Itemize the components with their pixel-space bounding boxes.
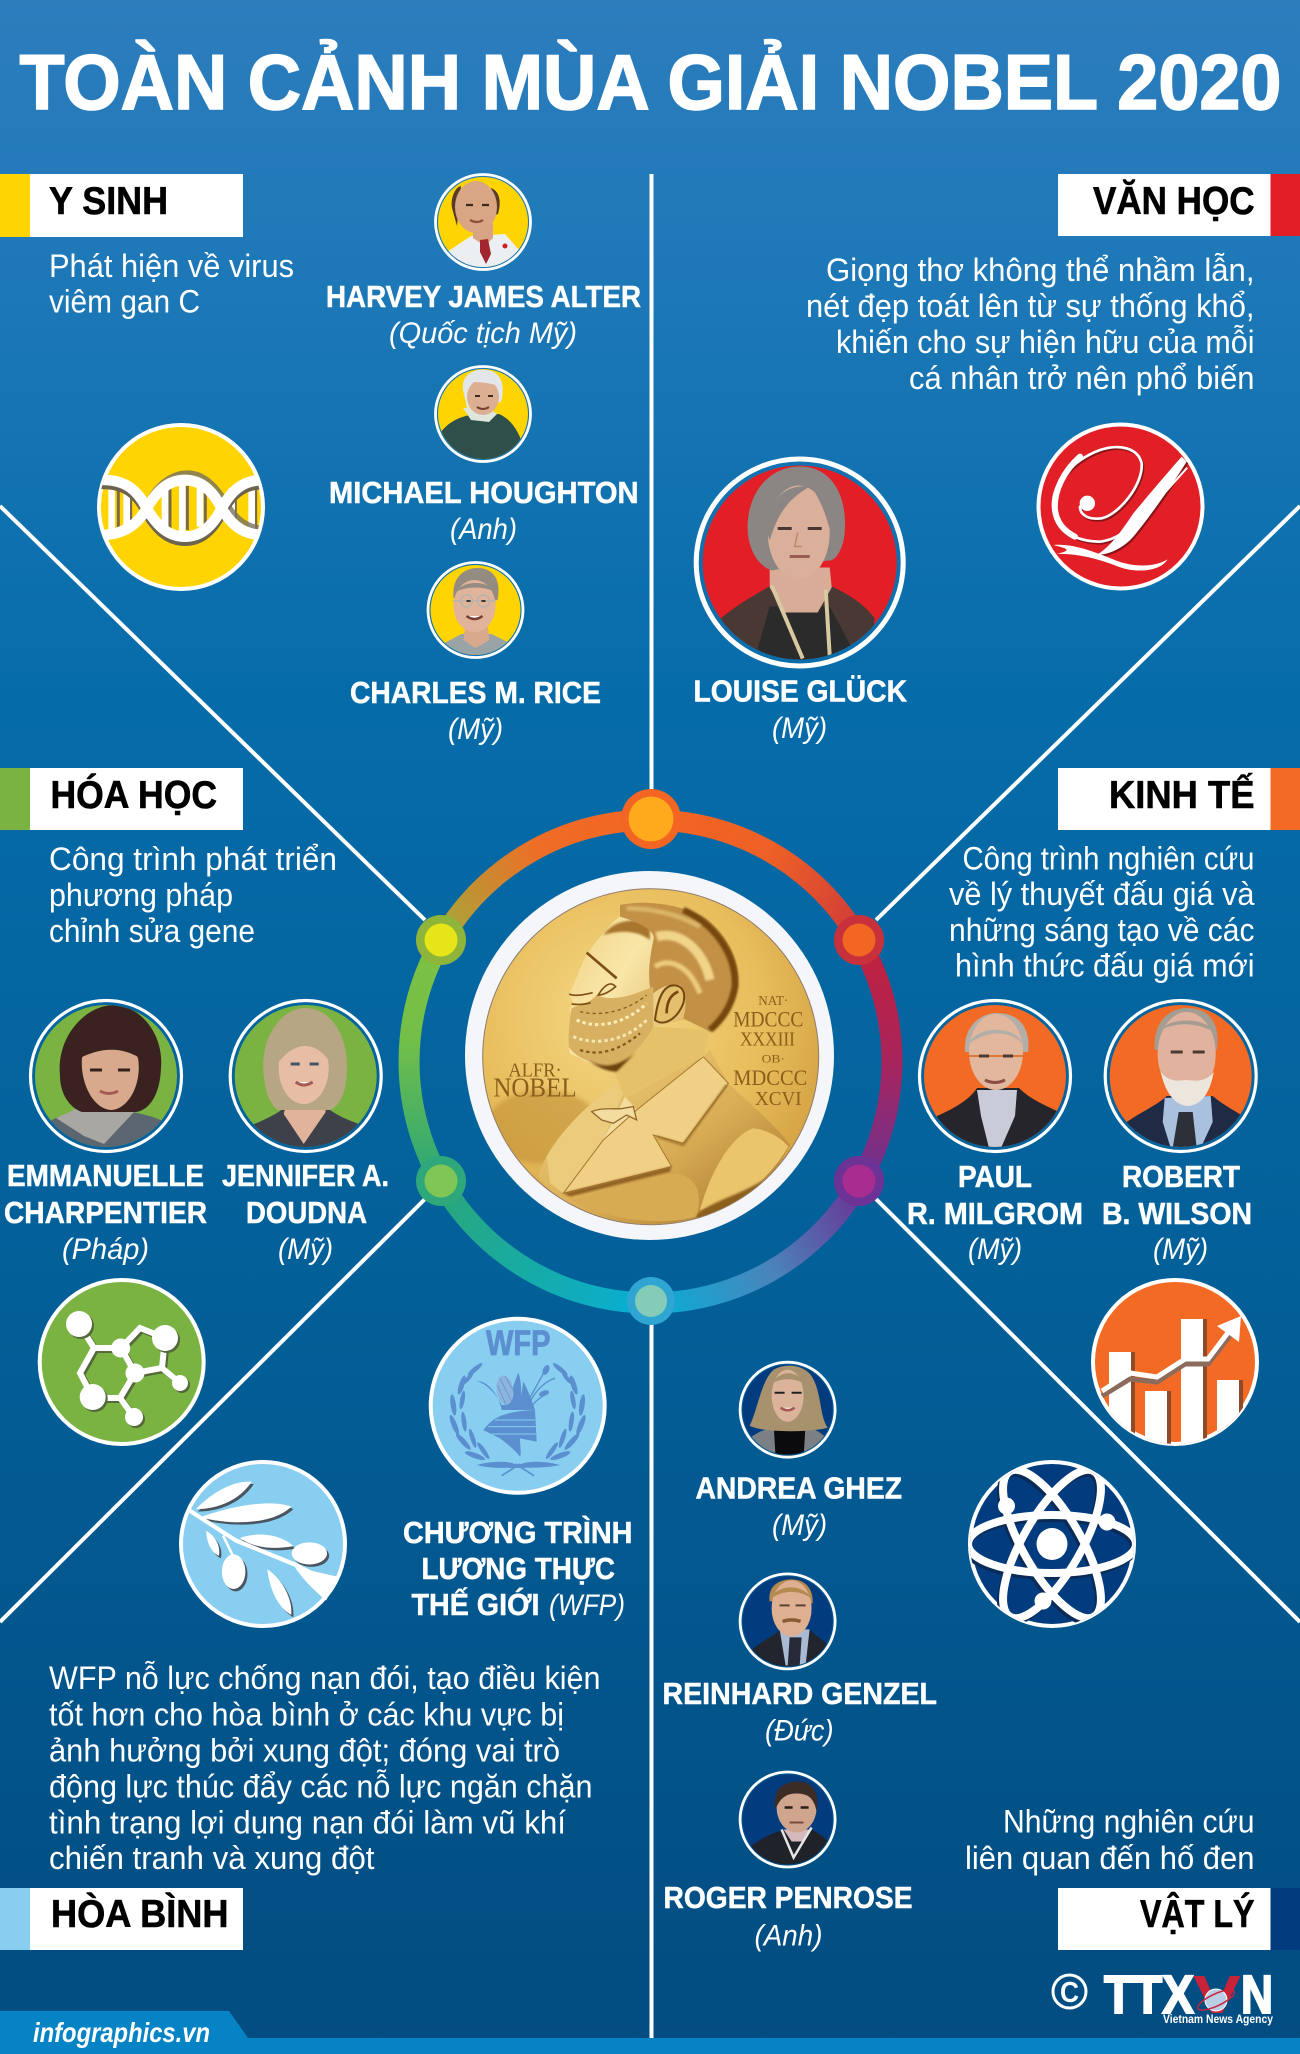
category label: y sinh: Y SINH [49, 180, 168, 223]
icon: wfp emblem: WFP [486, 1324, 550, 1363]
description: kinh te: Công trình nghiên cứu [962, 840, 1254, 876]
portrait: jennifer a. doudna [230, 1000, 381, 1156]
icon: olive branch [181, 1462, 345, 1626]
description: vat ly: liên quan đến hố đen [965, 1840, 1254, 1876]
medal bust [487, 903, 790, 1225]
logo: ttxvn [1053, 1965, 1273, 2026]
name: world food programme: THẾ GIỚI [412, 1586, 540, 1622]
name: michael houghton: MICHAEL HOUGHTON [329, 475, 638, 510]
name: paul r. milgrom: PAUL [958, 1159, 1032, 1194]
medal inscriptions [493, 993, 807, 1110]
name: roger penrose [664, 1880, 912, 1952]
name: robert b. wilson: B. WILSON [1102, 1196, 1252, 1231]
name: world food programme: CHƯƠNG TRÌNH [403, 1515, 632, 1550]
name: jennifer a. doudna [222, 1158, 389, 1266]
portrait: charles m. rice [428, 562, 523, 660]
name: harvey james alter: (Quốc tịch Mỹ) [389, 317, 577, 350]
name: paul r. milgrom: (Mỹ) [968, 1233, 1022, 1266]
category label: van hoc [1058, 174, 1300, 236]
name: michael houghton [329, 475, 638, 546]
name: jennifer a. doudna: DOUDNA [246, 1195, 367, 1230]
name: charles m. rice: CHARLES M. RICE [350, 675, 601, 710]
description: vat ly [965, 1804, 1254, 1876]
description: hoa hoc: chỉnh sửa gene [49, 913, 255, 949]
description: y sinh: Phát hiện về virus [49, 248, 294, 284]
medal inscriptions: NAT· [758, 993, 788, 1008]
name: andrea ghez: ANDREA GHEZ [696, 1470, 902, 1506]
description: kinh te: về lý thuyết đấu giá và [949, 876, 1255, 912]
logo: ttxvn: TTX [1104, 1965, 1194, 2025]
panel: van hoc [694, 174, 1300, 745]
description: y sinh: viêm gan C [49, 284, 200, 320]
medal inscriptions: ALFR· [508, 1060, 562, 1082]
website credit: infographics.vn [33, 2017, 210, 2048]
category label: hoa binh [0, 1888, 243, 1950]
name: harvey james alter: HARVEY JAMES ALTER [326, 279, 641, 314]
ring nodes [416, 789, 884, 1325]
name: robert b. wilson [1102, 1159, 1252, 1266]
portrait: harvey james alter [436, 174, 530, 272]
portrait: emmanuelle charpentier [30, 1000, 182, 1156]
icon: dna helix [97, 425, 267, 589]
name: paul r. milgrom [907, 1159, 1083, 1266]
description: van hoc [806, 252, 1254, 396]
central color ring [409, 820, 892, 1303]
name: louise gluck [694, 674, 908, 745]
description: hoa hoc: phương pháp [49, 877, 233, 913]
name: reinhard genzel: (Đức) [765, 1714, 834, 1748]
name: charles m. rice: (Mỹ) [448, 713, 503, 746]
icon: atom [966, 1457, 1136, 1634]
panel: hoa hoc [0, 768, 389, 1444]
description: hoa binh [49, 1660, 600, 1876]
portrait: michael houghton [436, 366, 530, 464]
description: van hoc: khiến cho sự hiện hữu của mỗi [836, 324, 1254, 360]
logo: ttxvn: V [1193, 1965, 1241, 2025]
description: van hoc: nét đẹp toát lên từ sự thống khổ, [806, 288, 1254, 324]
description: kinh te [949, 840, 1255, 984]
description: kinh te: những sáng tạo về các [949, 912, 1254, 948]
medal inscriptions: OB· [762, 1052, 785, 1066]
medal inscriptions: XCVI [755, 1088, 802, 1110]
name: emmanuelle charpentier: (Pháp) [62, 1233, 149, 1266]
description: van hoc: Giọng thơ không thể nhầm lẫn, [826, 252, 1254, 288]
name: reinhard genzel: REINHARD GENZEL [662, 1676, 937, 1711]
name: emmanuelle charpentier: CHARPENTIER [4, 1195, 207, 1230]
medal inscriptions: MDCCC [733, 1007, 803, 1032]
medal inscriptions: NOBEL [493, 1073, 577, 1103]
description: hoa binh: ảnh hưởng bởi xung đột; đóng vai trò [49, 1732, 560, 1768]
logo: ttxvn: N [1241, 1965, 1273, 2025]
icon: molecule [40, 1280, 204, 1444]
name: charles m. rice [350, 675, 601, 746]
name: robert b. wilson: ROBERT [1122, 1159, 1240, 1194]
description: hoa binh: chiến tranh và xung đột [49, 1840, 375, 1876]
icon: growth chart [1093, 1280, 1257, 1452]
nobel medal [465, 871, 834, 1240]
name: harvey james alter [326, 279, 641, 350]
name: andrea ghez [696, 1470, 902, 1542]
category label: kinh te: KINH TẾ [1109, 773, 1254, 817]
description: hoa binh: WFP nỗ lực chống nạn đói, tạo điều kiện [49, 1660, 600, 1696]
description: hoa hoc: Công trình phát triển [49, 841, 337, 877]
name: michael houghton: (Anh) [450, 513, 517, 546]
name: paul r. milgrom: R. MILGROM [907, 1196, 1083, 1231]
portrait: louise gluck [696, 459, 903, 666]
name: jennifer a. doudna: JENNIFER A. [222, 1158, 389, 1193]
description: hoa hoc [49, 841, 337, 949]
icon: wfp emblem [431, 1319, 605, 1493]
description: vat ly: Những nghiên cứu [1003, 1804, 1254, 1840]
name: jennifer a. doudna: (Mỹ) [278, 1233, 333, 1266]
portrait: robert b. wilson [1105, 1000, 1256, 1156]
name: louise gluck: (Mỹ) [772, 712, 827, 745]
category label: van hoc: VĂN HỌC [1093, 179, 1254, 223]
description: hoa binh: tình trạng lợi dụng nạn đói làm vũ khí [49, 1804, 566, 1840]
name: louise gluck: LOUISE GLÜCK [694, 674, 908, 708]
panel: hoa binh [0, 1319, 632, 1950]
name: roger penrose: (Anh) [754, 1920, 822, 1952]
panel: vat ly [662, 1362, 1300, 1952]
description: kinh te: hình thức đấu giá mới [955, 948, 1254, 984]
icon: script letter l [1038, 424, 1202, 588]
name: world food programme: LƯƠNG THỰC [422, 1551, 615, 1586]
name: roger penrose: ROGER PENROSE [664, 1880, 912, 1915]
category label: hoa binh: HÒA BÌNH [51, 1892, 228, 1936]
portrait: andrea ghez [740, 1362, 835, 1460]
category label: hoa hoc [0, 768, 243, 830]
description: van hoc: cá nhân trở nên phổ biến [909, 360, 1254, 396]
name: reinhard genzel [662, 1676, 937, 1748]
panel: kinh te [907, 768, 1300, 1452]
description: hoa binh: động lực thúc đẩy các nỗ lực ngăn chặn [49, 1768, 592, 1804]
category label: kinh te [1058, 768, 1300, 830]
panel: y sinh [0, 174, 641, 746]
description: hoa binh: tốt hơn cho hòa bình ở các khu vực bị [49, 1696, 564, 1732]
copyright mark: C [1060, 1977, 1079, 2009]
category label: y sinh [0, 174, 243, 237]
name: world food programme: (WFP) [549, 1589, 625, 1622]
portrait: roger penrose [740, 1772, 835, 1870]
name: emmanuelle charpentier: EMMANUELLE [7, 1158, 204, 1193]
portrait: reinhard genzel [740, 1574, 835, 1671]
name: world food programme [403, 1515, 632, 1622]
category label: hoa hoc: HÓA HỌC [50, 773, 217, 817]
name: robert b. wilson: (Mỹ) [1153, 1233, 1208, 1266]
copyright mark [1053, 1975, 1086, 2009]
category label: vat ly: VẬT LÝ [1140, 1892, 1254, 1936]
footer bar [0, 2011, 1300, 2054]
medal inscriptions: XXXIII [740, 1029, 795, 1051]
name: andrea ghez: (Mỹ) [772, 1509, 827, 1542]
name: emmanuelle charpentier [4, 1158, 207, 1266]
description: y sinh [49, 248, 294, 320]
category label: vat ly [1058, 1888, 1300, 1950]
logo: ttxvn: Vietnam News Agency [1163, 2012, 1273, 2026]
portrait: paul r. milgrom [920, 1000, 1070, 1156]
medal inscriptions: MDCCC [733, 1065, 807, 1090]
